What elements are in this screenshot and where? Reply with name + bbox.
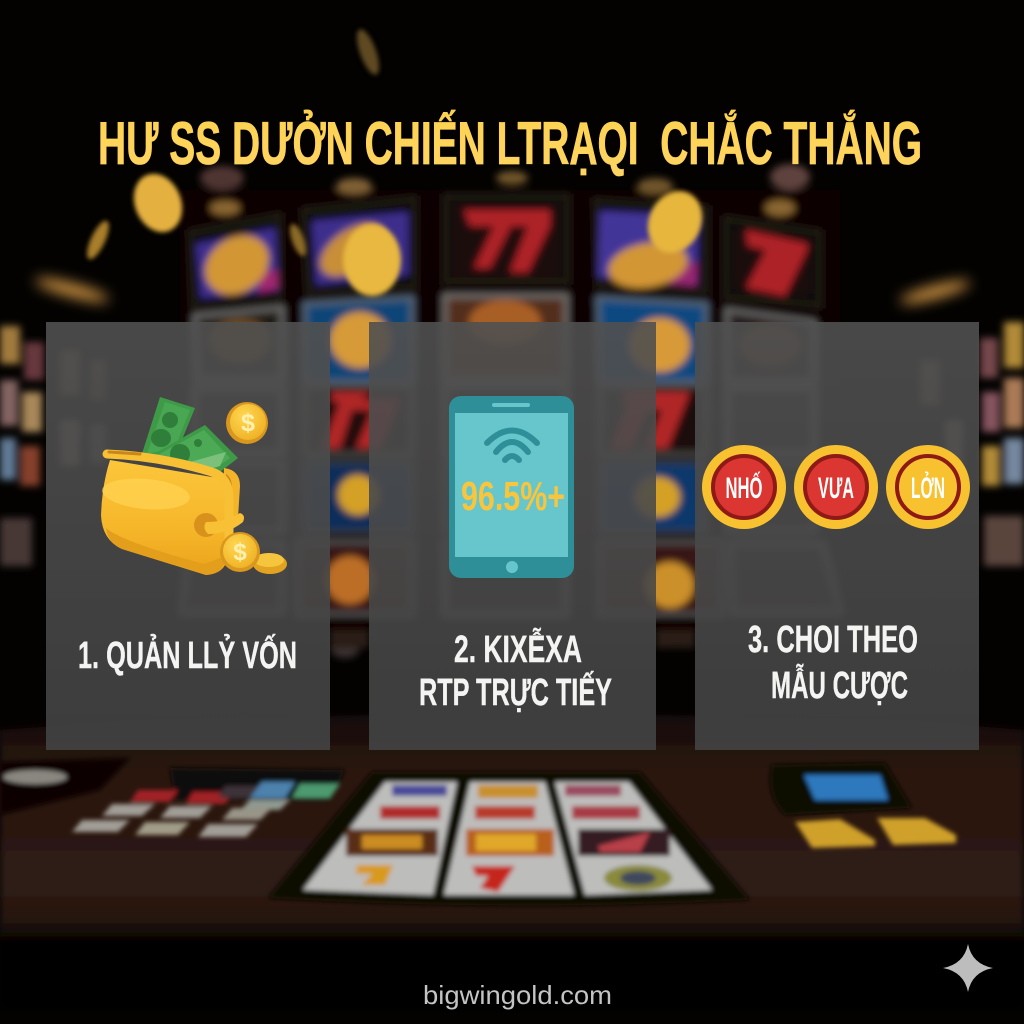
buttons left (0, 758, 130, 815)
row 3 (195, 386, 814, 454)
table (0, 712, 1024, 1010)
label: step 2: 2. KIXỄXA (454, 627, 582, 671)
label: step 3 (748, 619, 918, 707)
label: step 2 (419, 627, 612, 714)
screen gold art (194, 223, 280, 307)
side shelves (0, 322, 1024, 566)
label: step 1: 1. QUẢN LLỶ VỐN (78, 632, 297, 677)
falling coins (83, 27, 712, 296)
icon: bet chip small (702, 445, 786, 529)
lower lip under machines (331, 642, 359, 658)
icon: bet chip large: LỞN (911, 471, 945, 505)
label: step 3: MẪU CƯỢC (771, 663, 908, 707)
wallet rim (107, 454, 229, 556)
icon: wallet with cash and coins (101, 397, 287, 575)
row 1 screens (196, 228, 278, 298)
label: step 3: 3. CHOI THEO (748, 619, 918, 661)
row 4 (195, 462, 814, 532)
icon: wallet with cash and coins: $ (241, 409, 255, 437)
slot machines (180, 164, 842, 658)
label: step 2: RTP TRỰC TIẾY (419, 670, 612, 714)
glow streaks (34, 274, 971, 307)
icon: bet chip medium: VƯA (818, 472, 854, 505)
slot panel on table (268, 772, 750, 906)
wallet body (101, 460, 228, 575)
wallet back flap (222, 468, 240, 522)
icon: bet chip large (886, 445, 970, 529)
panel: RTP (369, 322, 656, 750)
toppers (210, 201, 240, 215)
row 2 (195, 296, 814, 382)
icon: phone with RTP: 96.5%+ (461, 473, 565, 519)
terminal right (770, 763, 912, 815)
footer site name: bigwingold.com (423, 980, 612, 1010)
sevens (464, 210, 550, 272)
row 5 (180, 542, 842, 614)
icon: bet chip small: NHỐ (726, 471, 762, 505)
icon: wallet with cash and coins: $ (233, 539, 247, 566)
row 1 frames (190, 196, 820, 308)
panel: quản lý vốn (46, 322, 330, 750)
panel: betting (695, 322, 979, 750)
icon: sparkle star (943, 944, 993, 992)
icon: phone with RTP (449, 396, 574, 578)
icon: bet chip medium (794, 445, 878, 529)
